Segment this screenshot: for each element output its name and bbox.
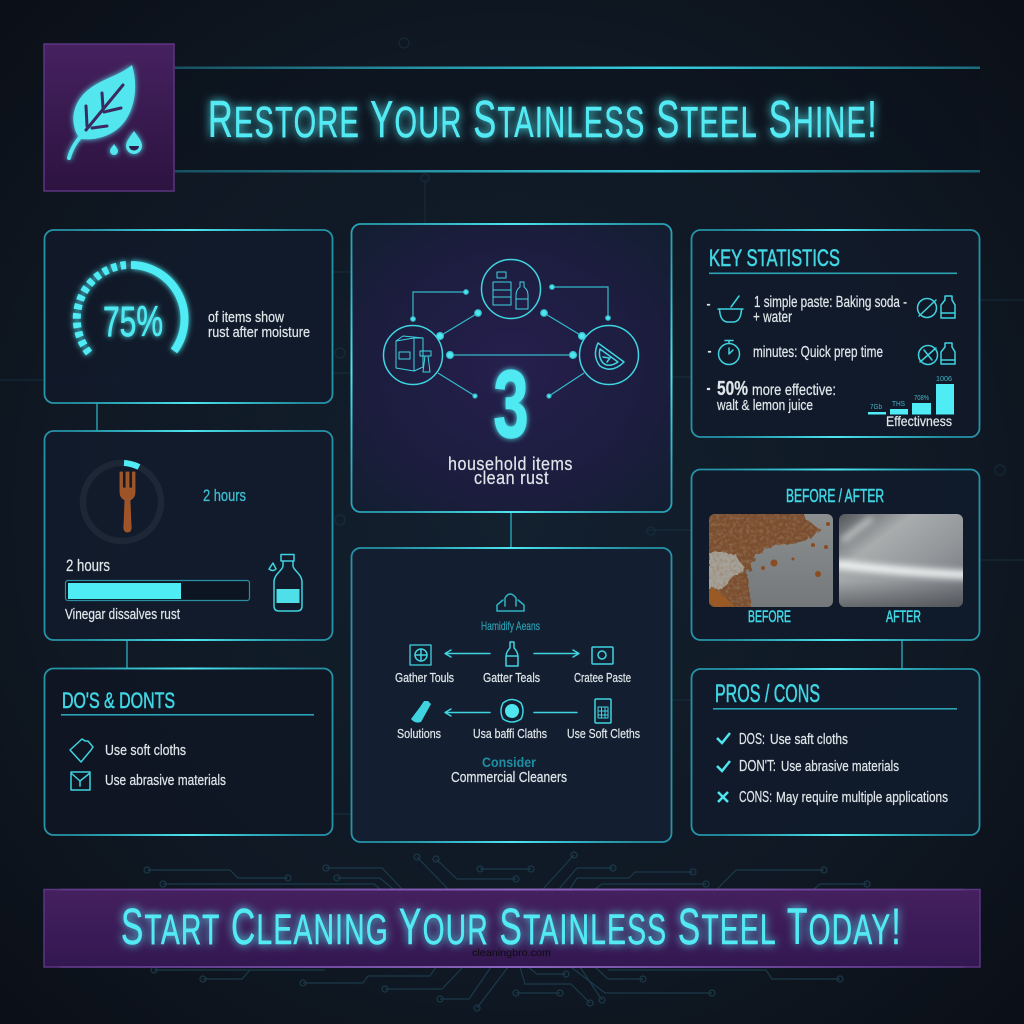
item: don't [717, 758, 899, 775]
title bar [175, 66, 980, 172]
icon: abrasive pad [71, 772, 90, 790]
connector network [411, 285, 610, 398]
heading: BEFORE / AFTER [786, 485, 884, 506]
item: don't: DON'T: [739, 758, 776, 775]
commercial cleaners label: Commercial Cleaners [451, 769, 567, 786]
step label: Hamidify Aeans [481, 619, 540, 633]
stat: 50 percent [707, 378, 836, 414]
row one labels [395, 670, 631, 685]
icon: bottle [269, 554, 302, 611]
icon: top step [497, 594, 524, 611]
panel connectors [97, 403, 902, 669]
arrow left [445, 709, 490, 716]
line right [534, 712, 577, 714]
caption: clean rust [474, 467, 549, 488]
panel: process steps [352, 548, 672, 842]
icon: stopwatch [718, 340, 740, 364]
photo captions: AFTER [886, 608, 921, 626]
caption [208, 310, 310, 341]
row one labels: Cratee Paste [574, 670, 631, 685]
item: soft cloths: Use soft cloths [105, 743, 186, 759]
stat: paste: 1 simple paste: Baking soda - [754, 294, 907, 311]
stat: 50 percent: walt & lemon juice [716, 398, 813, 414]
caption [448, 453, 573, 488]
heading: KEY STATISTICS [709, 245, 840, 272]
timer ring with rusty fork [83, 463, 161, 541]
icon: spray nozzle [411, 701, 431, 723]
title: RESTORE YOUR STAINLESS STEEL SHINE! [208, 91, 878, 149]
duration heading: 2 hours [66, 556, 110, 575]
duration label: 2 hours [203, 486, 246, 505]
caption: household items [448, 453, 573, 474]
call to action banner [44, 890, 980, 967]
panel: key statistics [692, 230, 980, 437]
item: abrasive materials: Use abrasive materials [105, 773, 226, 789]
row two labels: Use Soft Cleths [567, 726, 640, 741]
row two labels [397, 726, 640, 741]
panel: vinegar timer [44, 431, 332, 640]
caption: of items show [208, 310, 284, 326]
row two labels: Usa baffi Claths [473, 726, 547, 741]
icons: leaf and shaker [918, 296, 955, 318]
item: dos: DOS: [739, 731, 765, 748]
photo: rusty steel [709, 514, 833, 607]
bar chart: effectiveness [868, 374, 954, 429]
icon: calculator [595, 699, 611, 723]
leaf icon tile [44, 44, 174, 191]
banner text: START CLEANING YOUR STAINLESS STEEL TODAY! [121, 898, 902, 955]
bar chart: effectiveness: 708% [914, 393, 929, 402]
row one labels: Gatter Teals [483, 670, 540, 685]
source credit: cleaningbro.com [472, 947, 551, 959]
icon: jar and bottle [482, 260, 540, 318]
panel: rust statistic [44, 230, 332, 403]
arrow right [534, 650, 579, 657]
panel: do's and don'ts [44, 668, 332, 835]
item: dos: Use saft cloths [770, 731, 848, 748]
heading: DO'S & DONTS [62, 688, 175, 713]
bar chart: effectiveness: 7Gb [870, 402, 882, 411]
item: cons [718, 789, 948, 806]
progress bar [66, 580, 250, 600]
stat: minutes: minutes: Quick prep time [753, 344, 883, 361]
icon: cloth [70, 739, 93, 762]
caption: rust after moisture [208, 325, 310, 341]
caption: Vinegar dissalves rust [65, 607, 180, 623]
stat: 50 percent: more effective: [752, 382, 836, 399]
panel: before and after [692, 470, 980, 640]
icon: bottle [506, 642, 518, 666]
bar chart: effectiveness: 1006 [936, 374, 952, 383]
icon: baking soda box and spray [384, 326, 442, 384]
stat: paste: + water [753, 309, 792, 326]
consider label: Consider [482, 754, 536, 770]
gauge 75% [77, 265, 185, 353]
icon: paste tile [592, 647, 613, 664]
icon: lemon slice [580, 326, 638, 384]
item: don't: Use abrasive materials [781, 758, 899, 775]
heading: PROS / CONS [715, 680, 820, 708]
item: cons: May require multiple applications [776, 789, 948, 806]
photo captions: BEFORE [748, 608, 791, 626]
item: cons: CONS: [739, 789, 772, 806]
icon: globe tile [410, 645, 431, 665]
stat: paste [707, 294, 907, 326]
icons: lemon and shaker [918, 343, 955, 364]
panel: household items [352, 224, 672, 512]
item: dos [717, 731, 848, 748]
big number 3: 3 [494, 351, 528, 458]
icon: scrub pad [501, 700, 523, 722]
photo captions [748, 608, 921, 626]
bar chart: effectiveness: Effectivness [886, 413, 952, 429]
arrow left [445, 650, 490, 657]
row one labels: Gather Touls [395, 670, 454, 685]
panel: pros and cons [692, 669, 980, 835]
photo: polished steel [835, 514, 970, 607]
bar chart: effectiveness: THS [892, 399, 905, 408]
icon: bowl [718, 296, 743, 322]
gauge 75%: 75% [103, 298, 163, 346]
row two labels: Solutions [397, 726, 441, 741]
stat: 50 percent: 50% [717, 378, 748, 400]
icon: leaf with droplets [69, 65, 142, 158]
